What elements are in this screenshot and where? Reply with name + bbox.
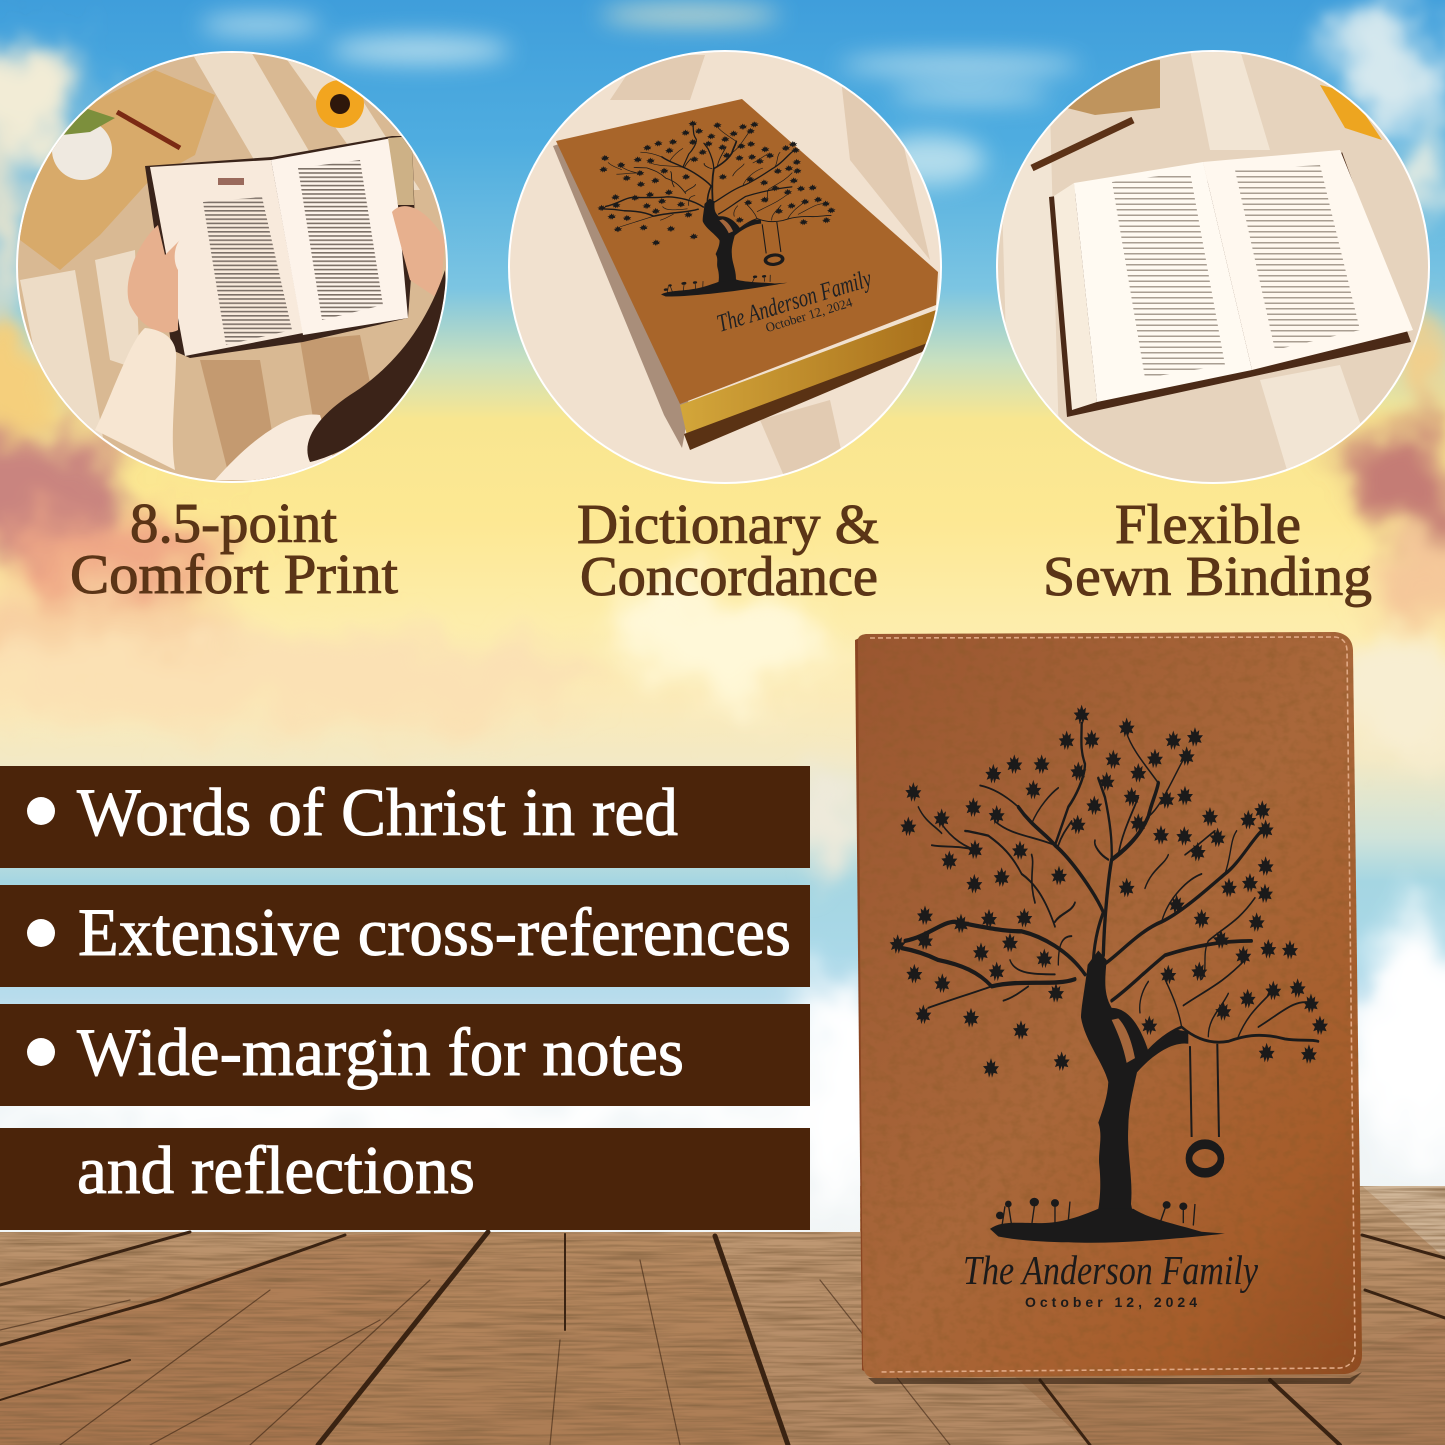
date: October 12, 2024 [1025, 1294, 1197, 1310]
book page block [1054, 183, 1097, 410]
spine [553, 143, 690, 448]
engraved leather Bible [855, 630, 1365, 1384]
heading: Dictionary & Concordance: Dictionary & [577, 494, 879, 556]
right page [1203, 150, 1413, 370]
heading: Flexible Sewn Binding: Sewn Binding [1043, 546, 1372, 608]
white vase [52, 120, 112, 180]
heading: 8.5-point Comfort Print [70, 493, 398, 606]
left page [1074, 162, 1252, 402]
vase leaves [62, 108, 115, 135]
feature bar: and reflections: and reflections [77, 1132, 475, 1208]
feature bar: Wide-margin for notes [0, 1004, 810, 1106]
wooden table [0, 1186, 1445, 1445]
feature bar: Words of Christ in red: Words of Christ in red [77, 774, 678, 850]
right column text [1235, 165, 1360, 350]
sweater arm [95, 328, 176, 470]
feature bar: Words of Christ in red [0, 766, 810, 868]
sunflower [316, 80, 364, 128]
burlap [1068, 60, 1160, 115]
cover [858, 632, 1362, 1378]
circle photo: leather Bible on table [505, 50, 945, 490]
feature bar: Extensive cross-references: Extensive cross-references [78, 894, 791, 970]
heading: Flexible Sewn Binding [1043, 494, 1372, 608]
heading: 8.5-point Comfort Print: 8.5-point [130, 493, 337, 555]
family name: The Anderson Family [963, 1247, 1259, 1293]
dark hair [307, 270, 450, 462]
brown pen [1032, 120, 1133, 168]
mini family name [716, 271, 870, 332]
circle photo: reading open Bible [15, 50, 450, 485]
left column text [1112, 172, 1225, 378]
hands [128, 225, 180, 332]
tree with swing [890, 705, 1328, 1243]
feature bar: Extensive cross-references [0, 885, 810, 987]
flower [1320, 85, 1382, 140]
mini family name: October 12, 2024 [764, 294, 855, 335]
feature bar: Wide-margin for notes: Wide-margin for notes [77, 1014, 684, 1090]
burlap cloth [20, 70, 215, 270]
spine edge [855, 634, 872, 1375]
gold page edge [680, 310, 936, 440]
heading: 8.5-point Comfort Print: Comfort Print [70, 544, 398, 606]
heading: Flexible Sewn Binding: Flexible [1115, 494, 1301, 556]
open book [145, 136, 415, 358]
mini tree [589, 106, 843, 305]
circle photo: open Bible flat [995, 50, 1435, 490]
stitching [870, 637, 1355, 1372]
mini family name: The Anderson Family [714, 265, 875, 338]
red pen [117, 112, 180, 148]
feature bar: and reflections [0, 1128, 810, 1230]
leather cover [556, 99, 938, 404]
book cover [1049, 152, 1411, 417]
heading: Dictionary & Concordance: Concordance [580, 546, 878, 608]
heading: Dictionary & Concordance [577, 494, 879, 608]
